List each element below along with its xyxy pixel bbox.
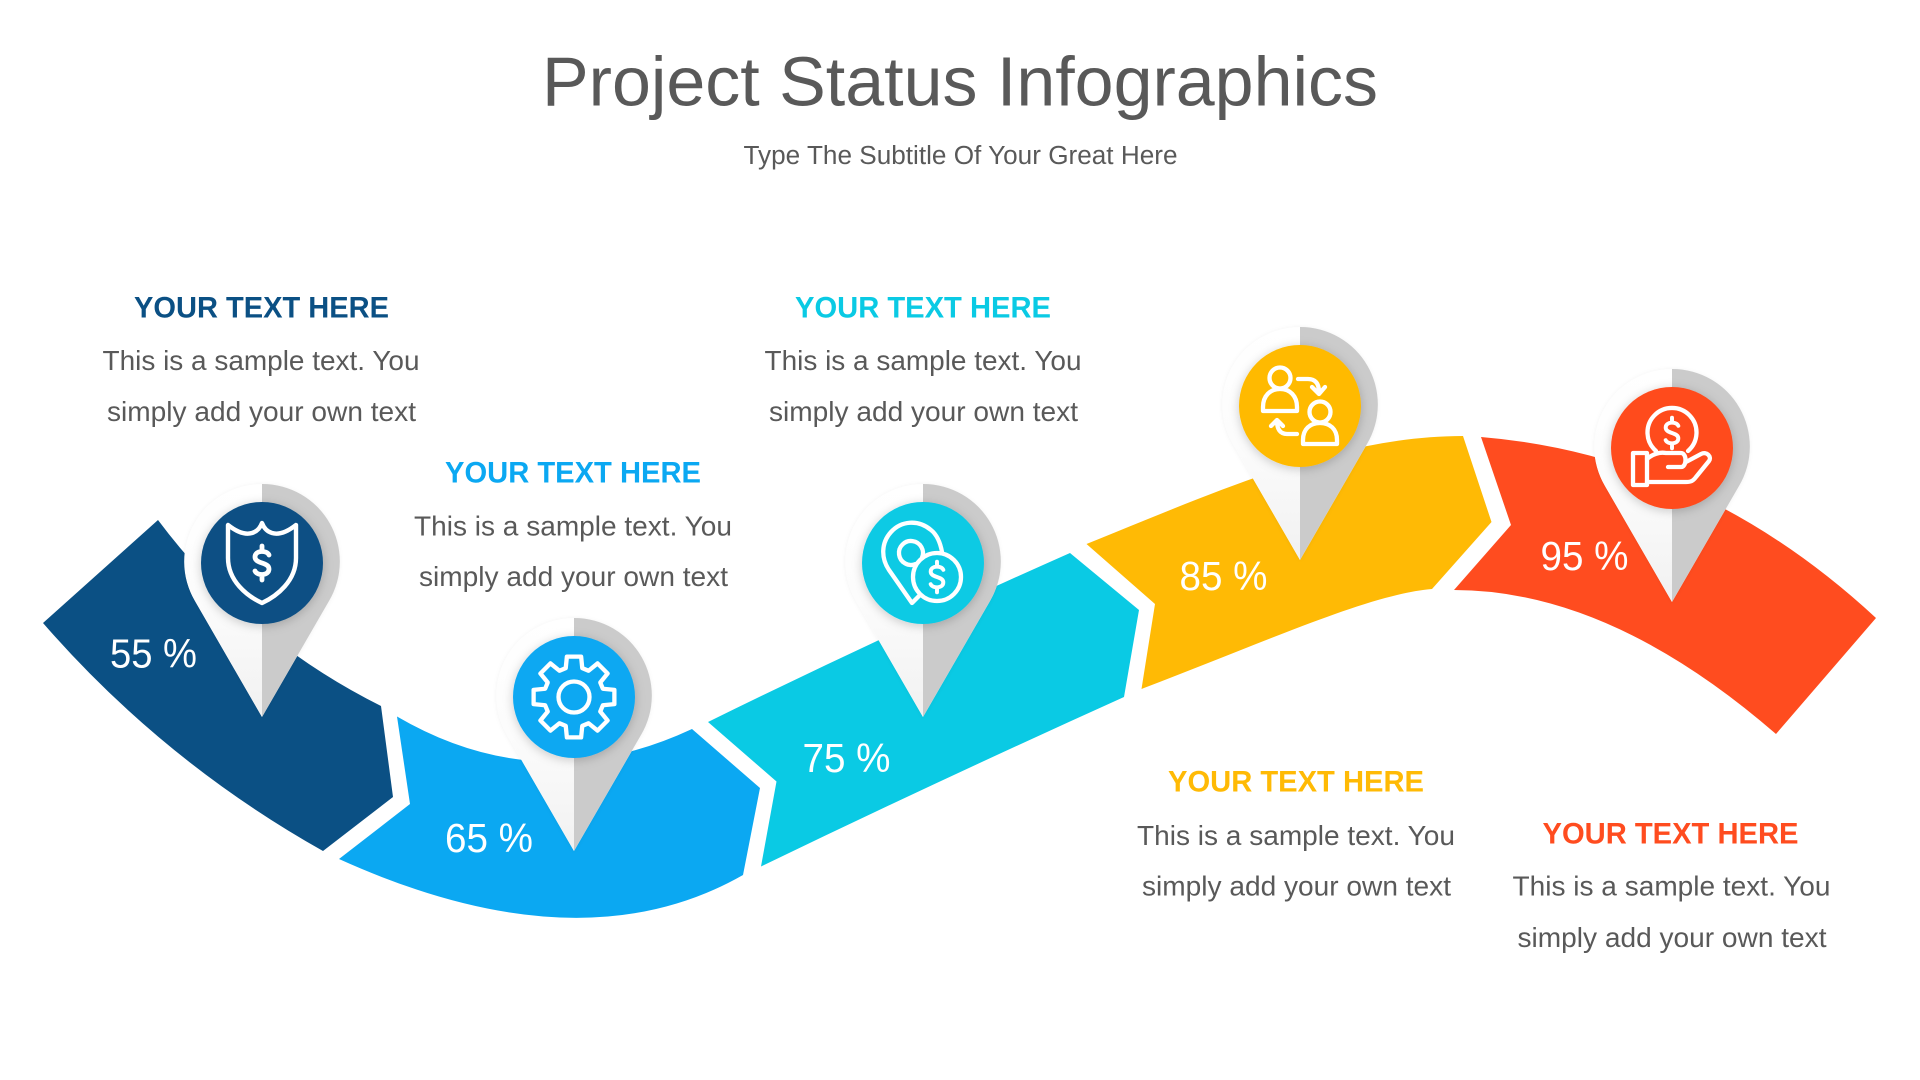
text block 4: YOUR TEXT HERE bbox=[1168, 766, 1424, 798]
icon: hand holding coin bbox=[1633, 408, 1710, 485]
text block 2: This is a sample text. You bbox=[414, 510, 732, 542]
icon: shield with dollar bbox=[228, 523, 296, 603]
map pin with shield icon bbox=[184, 484, 340, 717]
title: Project Status Infographics bbox=[542, 42, 1378, 120]
panel: step 4 85 percent bbox=[1086, 327, 1492, 902]
text block 5: simply add your own text bbox=[1518, 922, 1827, 953]
text block 5: YOUR TEXT HERE bbox=[1542, 818, 1798, 850]
panel: step 5 95 percent bbox=[1454, 369, 1876, 953]
panel: step 1 55 percent bbox=[43, 292, 420, 851]
percent label 85: 85 % bbox=[1180, 553, 1268, 599]
subtitle: Type The Subtitle Of Your Great Here bbox=[744, 142, 1178, 170]
text block 1: This is a sample text. You bbox=[102, 345, 420, 376]
text block 2 bbox=[414, 456, 732, 592]
band segment 2 bbox=[339, 716, 760, 918]
icon: two people exchange bbox=[1263, 368, 1337, 444]
icon: gear bbox=[534, 657, 614, 737]
text block 2: YOUR TEXT HERE bbox=[445, 456, 701, 490]
text block 2: simply add your own text bbox=[419, 561, 728, 592]
panel: step 2 65 percent bbox=[339, 456, 760, 918]
text block 1: YOUR TEXT HERE bbox=[134, 292, 389, 324]
percent label 95: 95 % bbox=[1540, 533, 1628, 579]
text block 1 bbox=[102, 292, 420, 427]
band segment 1 bbox=[43, 520, 393, 851]
text block 3: YOUR TEXT HERE bbox=[795, 292, 1051, 324]
text block 4: This is a sample text. You bbox=[1137, 820, 1455, 851]
percent label 65: 65 % bbox=[445, 815, 533, 861]
map pin with hand coin icon bbox=[1594, 369, 1750, 602]
icon: location pin with coin bbox=[883, 523, 961, 603]
text block 5: This is a sample text. You bbox=[1512, 870, 1830, 902]
text block 3 bbox=[764, 292, 1082, 427]
panel: step 3 75 percent bbox=[708, 292, 1139, 866]
band segment 5 bbox=[1454, 437, 1876, 734]
percent label 75: 75 % bbox=[802, 735, 890, 781]
text block 4: simply add your own text bbox=[1142, 870, 1451, 902]
band segment 4 bbox=[1086, 436, 1492, 689]
band segment 3 bbox=[708, 553, 1139, 866]
text block 3: This is a sample text. You bbox=[764, 345, 1082, 376]
text block 3: simply add your own text bbox=[769, 396, 1078, 427]
percent label 55: 55 % bbox=[110, 630, 197, 676]
map pin with people exchange icon bbox=[1222, 327, 1378, 560]
map pin with gear icon bbox=[496, 618, 652, 851]
map pin with location coin icon bbox=[845, 484, 1001, 717]
text block 4 bbox=[1137, 766, 1455, 902]
text block 1: simply add your own text bbox=[107, 396, 416, 427]
text block 5 bbox=[1512, 818, 1830, 953]
